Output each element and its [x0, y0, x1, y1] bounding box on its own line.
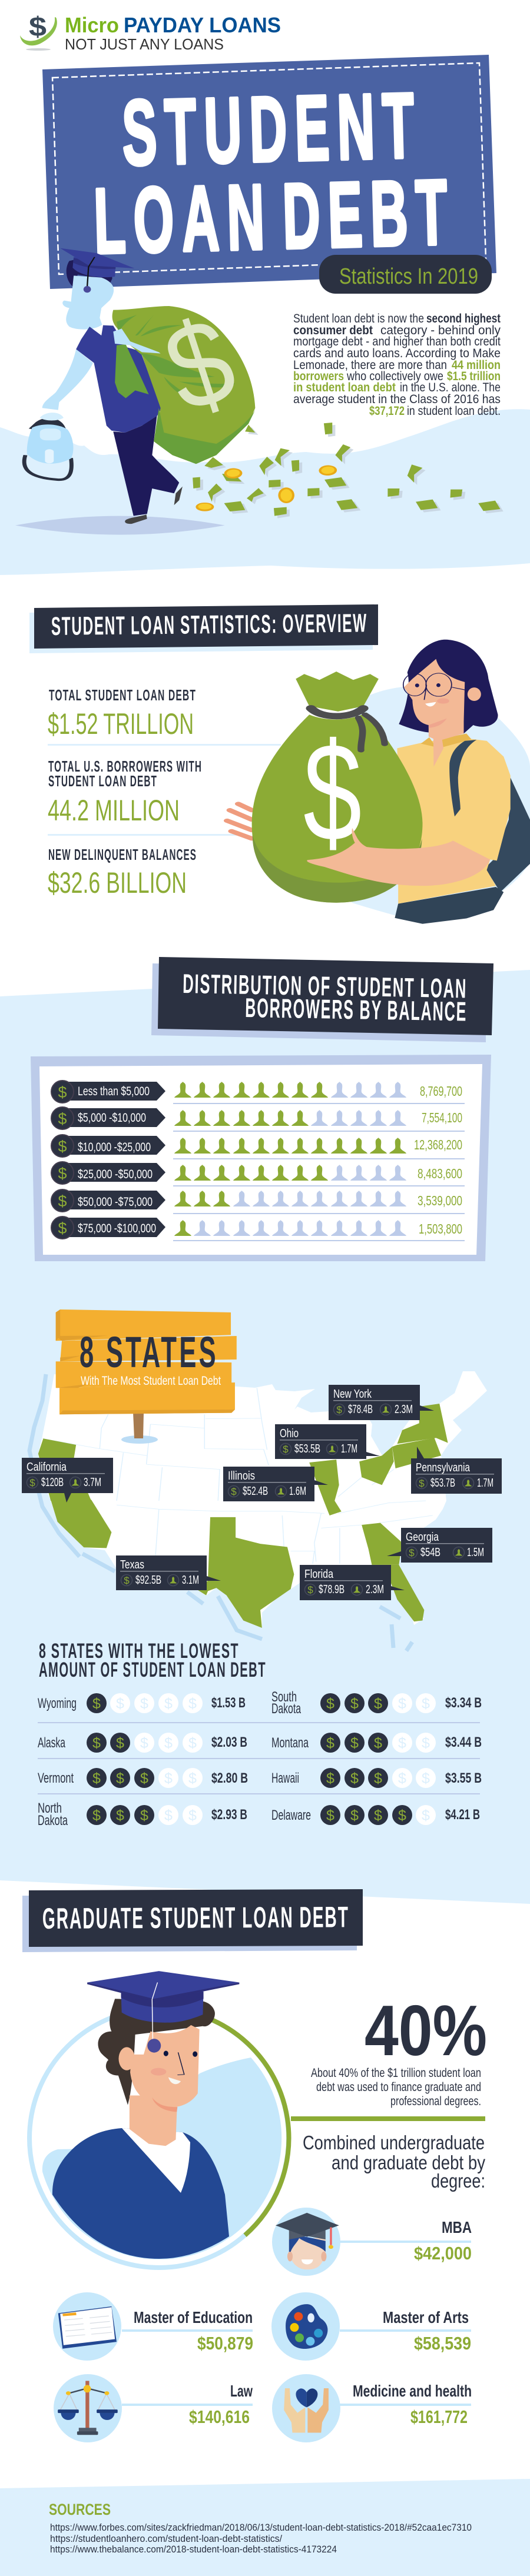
row: 5000 to 10000: 7,554,100 — [422, 1110, 462, 1125]
row: Montana — [271, 1733, 482, 1753]
stat: 40 percent — [311, 1990, 487, 2108]
row: Alaska: $$ — [92, 1735, 124, 1751]
sweater — [52, 2128, 229, 2259]
row: Hawaii: $3.55 B — [445, 1770, 482, 1786]
row: North Dakota — [38, 1800, 247, 1829]
row: Wyoming: $$$$ — [116, 1696, 197, 1712]
callout: Pennsylvania: $53.7B — [430, 1477, 455, 1490]
row: Alaska: $2.03 B — [211, 1734, 247, 1750]
row: South Dakota: $3.34 B — [445, 1695, 482, 1711]
icon: palette — [286, 2304, 327, 2349]
stat: total debt: $1.52 TRILLION — [48, 707, 194, 740]
callout: Illinois: $52.4B — [243, 1485, 268, 1498]
row: 50000 to 75000: $ — [58, 1192, 67, 1210]
intro text block: consumer debt — [293, 324, 373, 337]
source links: https://www.thebalance.com/2018-student-loan-debt-statistics-4173224 — [50, 2544, 337, 2555]
row: North Dakota: Dakota — [38, 1813, 68, 1829]
heading: lowest states: AMOUNT OF STUDENT LOAN DEBT — [39, 1658, 266, 1681]
stat: delinquent: NEW DELINQUENT BALANCES — [48, 846, 197, 863]
row: Alaska: $$$ — [140, 1735, 197, 1751]
callout: Florida — [300, 1565, 405, 1600]
fingers — [227, 804, 252, 839]
money falling: bills — [193, 423, 504, 518]
row: North Dakota: $$ — [164, 1807, 197, 1824]
row: 25000 to 50000: 8,483,600 — [418, 1166, 462, 1181]
shoes — [125, 487, 183, 524]
title — [92, 74, 456, 272]
callout: California: California — [26, 1461, 67, 1474]
row: 75000 to 100000: $75,000 -$100,000 — [78, 1222, 156, 1235]
stat: 40 percent: debt was used to finance graduate and — [316, 2080, 481, 2094]
callout: Georgia — [387, 1528, 492, 1563]
row: 75000 to 100000: 1,503,800 — [419, 1221, 462, 1237]
ground shadow — [15, 516, 225, 535]
row: South Dakota — [271, 1689, 482, 1717]
heading: sources: SOURCES — [49, 2501, 111, 2518]
logo — [20, 11, 281, 53]
logo: PAYDAY LOANS — [124, 13, 281, 37]
row: Montana: Montana — [271, 1735, 309, 1751]
degree: Medicine and health — [272, 2374, 472, 2442]
cap — [121, 1992, 204, 2023]
subheading: combined debt: Combined undergraduate — [303, 2132, 485, 2153]
intro text block: in the U.S. alone. The — [400, 381, 501, 394]
row: 50000 to 75000 — [51, 1189, 462, 1212]
callout: Pennsylvania — [411, 1447, 502, 1494]
row: South Dakota: $$$ — [326, 1696, 382, 1712]
row: 25000 to 50000: $25,000 -$50,000 — [78, 1168, 153, 1181]
callout: Texas: 3.1M — [182, 1574, 199, 1587]
source links: https://www.forbes.com/sites/zackfriedman/2018/06/13/student-loan-debt-statistics-2018/#52caa1ec7310 — [50, 2522, 472, 2533]
subheading: combined debt — [303, 2132, 485, 2192]
illustration: woman holding money bag — [227, 640, 530, 924]
degree: MBA: $42,000 — [414, 2243, 472, 2263]
callout: New York: $ — [336, 1404, 342, 1415]
callout: California — [22, 1458, 113, 1503]
row: Alaska: Alaska — [38, 1735, 65, 1751]
arm and hand — [307, 828, 490, 886]
sign: 8 states: 8 STATES — [80, 1328, 218, 1377]
row: Vermont: Vermont — [38, 1770, 74, 1786]
row: 10000 to 25000: 12,368,200 — [414, 1137, 462, 1152]
heading: lowest states: 8 STATES WITH THE LOWEST — [39, 1640, 239, 1663]
ring — [29, 2009, 289, 2268]
degree: Master of Education — [53, 2292, 253, 2361]
row: less than 5000: $ — [58, 1083, 67, 1101]
offshore shadows — [29, 1374, 412, 1651]
degree: Law: $140,616 — [189, 2407, 250, 2427]
hair — [399, 640, 498, 733]
row: Hawaii — [271, 1768, 482, 1788]
row: Delaware: $4.21 B — [445, 1807, 480, 1823]
callout: Georgia: $54B — [420, 1546, 440, 1559]
money sack — [112, 306, 255, 464]
row: 75000 to 100000: $ — [58, 1219, 67, 1237]
degree: Master of Arts: $58,539 — [414, 2333, 471, 2354]
callout: Florida: $78.9B — [319, 1583, 344, 1596]
row: Wyoming: $ — [92, 1696, 101, 1712]
hair — [98, 1999, 215, 2105]
face — [404, 659, 465, 725]
callout: California: $ — [29, 1477, 35, 1488]
illustration: graduate — [29, 1971, 289, 2268]
row: Vermont: $$ — [164, 1770, 197, 1787]
neck — [429, 719, 464, 767]
intro text block: average student in the Class of 2016 has — [293, 393, 501, 406]
row: Vermont: $2.80 B — [211, 1770, 248, 1786]
callout: Georgia: Georgia — [406, 1531, 439, 1544]
panel: lowest states table — [38, 1689, 482, 1829]
icon: dollar swoosh: $ — [29, 11, 47, 42]
panel: footer sources — [0, 2479, 530, 2576]
stat: 40 percent: professional degrees. — [390, 2095, 481, 2108]
row: 10000 to 25000: $ — [58, 1138, 67, 1155]
row: 10000 to 25000 — [51, 1135, 462, 1157]
heading: lowest states — [39, 1640, 266, 1681]
row: 5000 to 10000: $5,000 -$10,000 — [78, 1111, 146, 1125]
logo: NOT JUST ANY LOANS — [65, 35, 224, 53]
callout: Ohio: $53.5B — [294, 1442, 320, 1455]
degree: Law: Law — [230, 2382, 253, 2400]
icon: hands holding heart — [284, 2388, 329, 2433]
intro text block — [293, 312, 501, 418]
intro text block: who collectively owe — [346, 370, 443, 383]
intro text block: 44 million — [452, 358, 501, 372]
degree: Master of Arts: Master of Arts — [383, 2308, 469, 2326]
row: Hawaii: Hawaii — [271, 1770, 299, 1786]
intro text block: in student loan debt — [293, 381, 396, 394]
sign boards — [56, 1309, 237, 1414]
degree: Medicine and health: $161,772 — [410, 2407, 468, 2427]
row: less than 5000 — [51, 1081, 462, 1103]
intro text block: $1.5 trillion — [447, 370, 501, 383]
row: Vermont — [38, 1768, 248, 1788]
callout: Pennsylvania: Pennsylvania — [416, 1461, 471, 1474]
callout: Pennsylvania: $ — [419, 1478, 425, 1489]
callout: Texas — [116, 1555, 221, 1590]
degree: Medicine and health: Medicine and health — [353, 2382, 472, 2400]
intro text block: mortgage debt - and higher than both credit — [293, 335, 501, 348]
row: Hawaii: $$$ — [326, 1770, 382, 1787]
degree: Master of Education: Master of Education — [134, 2308, 253, 2326]
heading: distribution — [151, 957, 493, 1042]
light blue section background — [0, 970, 530, 1904]
subtitle pill: Statistics In 2019 — [339, 264, 478, 289]
row: North Dakota: $$$ — [92, 1807, 148, 1824]
intro background wave — [0, 409, 530, 575]
row: 10000 to 25000: $10,000 -$25,000 — [78, 1141, 151, 1154]
callout: California: $120B — [41, 1476, 64, 1489]
sign: 8 states: With The Most Student Loan Debt — [81, 1374, 221, 1388]
row: Delaware: $ — [422, 1807, 430, 1824]
sack dollar sign: $ — [150, 290, 250, 438]
icon: graduate face — [276, 2213, 339, 2269]
intro text block: in student loan debt. — [407, 404, 501, 418]
money bag — [252, 672, 423, 903]
intro text block: Lemonade, there are more than — [293, 358, 447, 372]
callout: Pennsylvania: 1.7M — [477, 1477, 493, 1490]
degree: Master of Education: $50,879 — [197, 2333, 253, 2354]
strap — [449, 740, 476, 816]
row: Wyoming: Wyoming — [38, 1696, 77, 1711]
callout: Illinois: 1.6M — [289, 1485, 306, 1498]
stat: borrowers: 44.2 MILLION — [48, 794, 180, 827]
intro text block: $37,172 — [369, 404, 405, 418]
icon: dollar swoosh — [20, 11, 57, 51]
shirt — [76, 325, 161, 433]
callout: Texas: Texas — [120, 1558, 144, 1571]
backdrop — [42, 2058, 281, 2259]
subheading: combined debt: and graduate debt by — [332, 2152, 485, 2173]
callout: Texas: $92.5B — [135, 1574, 161, 1587]
row: 5000 to 10000 — [51, 1107, 462, 1129]
intro text block: category - behind only — [380, 324, 501, 337]
stat: delinquent — [48, 846, 197, 899]
degree: MBA — [272, 2208, 472, 2276]
row: 5000 to 10000: $ — [58, 1110, 67, 1128]
callout: Georgia: 1.5M — [467, 1546, 484, 1559]
backpack — [24, 413, 73, 480]
pants — [395, 887, 504, 924]
title: STUDENT — [121, 74, 423, 184]
row: Alaska — [38, 1733, 247, 1753]
subtitle pill — [319, 255, 492, 294]
face — [130, 2025, 200, 2108]
sign: 8 states — [56, 1309, 237, 1444]
row: Montana: $$$ — [326, 1735, 382, 1751]
callout: Ohio: 1.7M — [341, 1442, 357, 1455]
callout: Florida: $ — [307, 1584, 313, 1596]
row: Delaware — [271, 1805, 480, 1825]
row: less than 5000: 8,769,700 — [420, 1083, 462, 1099]
row: South Dakota: $$ — [398, 1696, 430, 1712]
callout: New York: $78.4B — [348, 1403, 373, 1416]
icon: scales — [58, 2381, 118, 2435]
map: united states — [29, 1371, 487, 1651]
callout: New York: New York — [333, 1388, 372, 1401]
state lines — [42, 1388, 394, 1501]
intro text block: second highest — [426, 312, 501, 325]
hair back — [67, 259, 112, 293]
stat: borrowers: STUDENT LOAN DEBT — [48, 772, 157, 790]
collar — [421, 733, 472, 747]
row: Delaware: Delaware — [271, 1807, 311, 1823]
row: Montana: $3.44 B — [445, 1734, 482, 1750]
heading: overview — [29, 604, 378, 653]
illustration: student carrying money sack — [15, 248, 255, 535]
stat: total debt: TOTAL STUDENT LOAN DEBT — [49, 686, 196, 704]
row: South Dakota: South — [271, 1689, 297, 1705]
row: Delaware: $$$$ — [326, 1807, 406, 1824]
banner: title panel — [42, 55, 496, 289]
row: Vermont: $$$ — [92, 1770, 148, 1787]
row dividers — [173, 1103, 465, 1241]
bag dollar sign: $ — [303, 714, 362, 870]
callout: Florida: Florida — [304, 1568, 334, 1581]
background circle — [352, 686, 530, 923]
row: Wyoming — [38, 1693, 246, 1713]
row: 25000 to 50000 — [51, 1162, 462, 1184]
shirt — [397, 739, 511, 904]
row: 25000 to 50000: $ — [58, 1165, 67, 1182]
row: Hawaii: $$ — [398, 1770, 430, 1787]
backpack — [485, 777, 530, 892]
row: less than 5000: Less than $5,000 — [78, 1085, 150, 1098]
arm — [42, 349, 93, 410]
glasses — [403, 673, 466, 700]
coins — [196, 463, 340, 511]
heading: graduate student loan debt — [22, 1889, 363, 1952]
row: 50000 to 75000: 3,539,000 — [418, 1193, 462, 1208]
degree: Master of Arts — [271, 2292, 471, 2361]
source links — [50, 2522, 472, 2555]
callout: Georgia: $ — [409, 1547, 415, 1558]
shirt — [122, 2128, 190, 2193]
graduation cap — [60, 248, 134, 292]
subheading: combined debt: degree: — [431, 2170, 485, 2192]
callout: Texas: $ — [124, 1575, 130, 1586]
callout: New York: 2.3M — [395, 1403, 413, 1416]
pants — [113, 414, 179, 516]
row: Wyoming: $1.53 B — [211, 1695, 246, 1711]
stat: borrowers — [48, 757, 202, 827]
degree: MBA: MBA — [442, 2218, 472, 2236]
logo: Micro — [65, 13, 119, 37]
head — [62, 275, 114, 330]
callout: Ohio — [275, 1424, 380, 1459]
stat: 40 percent: 40% — [365, 1990, 487, 2070]
icon: book — [58, 2306, 117, 2349]
row: South Dakota: Dakota — [271, 1701, 301, 1717]
degree: Law — [54, 2374, 253, 2442]
intro text block: borrowers — [293, 370, 344, 383]
title: LOAN DEBT — [92, 160, 456, 272]
panel: overview stats — [48, 686, 281, 899]
stat: delinquent: $32.6 BILLION — [48, 866, 187, 899]
row: 50000 to 75000: $50,000 -$75,000 — [78, 1195, 153, 1209]
callout: Ohio: $ — [283, 1444, 289, 1455]
callout: California: 3.7M — [84, 1476, 101, 1489]
country outline — [38, 1371, 487, 1628]
callout: Illinois: $ — [231, 1486, 237, 1497]
intro text block: Student loan debt is now the — [293, 312, 424, 325]
row: 75000 to 100000 — [51, 1216, 462, 1239]
callout: Ohio: Ohio — [280, 1427, 299, 1440]
row: North Dakota: North — [38, 1800, 62, 1816]
stat: borrowers: TOTAL U.S. BORROWERS WITH — [48, 757, 202, 775]
intro text block: cards and auto loans. According to Make — [293, 347, 501, 360]
sign post — [121, 1435, 158, 1444]
callout: Illinois: Illinois — [228, 1470, 255, 1483]
row: Montana: $$ — [398, 1735, 430, 1751]
callout: Florida: 2.3M — [366, 1583, 384, 1596]
row: North Dakota: $2.93 B — [211, 1807, 247, 1823]
stat: total debt — [48, 686, 196, 740]
stat: 40 percent: About 40% of the $1 trillion student loan — [311, 2066, 481, 2080]
callout: New York — [329, 1385, 434, 1420]
panel: distribution chart — [31, 1055, 491, 1261]
callout: Illinois — [223, 1467, 328, 1501]
neck — [130, 2096, 177, 2146]
source links: https://studentloanhero.com/student-loan-debt-statistics/ — [50, 2533, 282, 2544]
highlighted states — [38, 1404, 448, 1515]
